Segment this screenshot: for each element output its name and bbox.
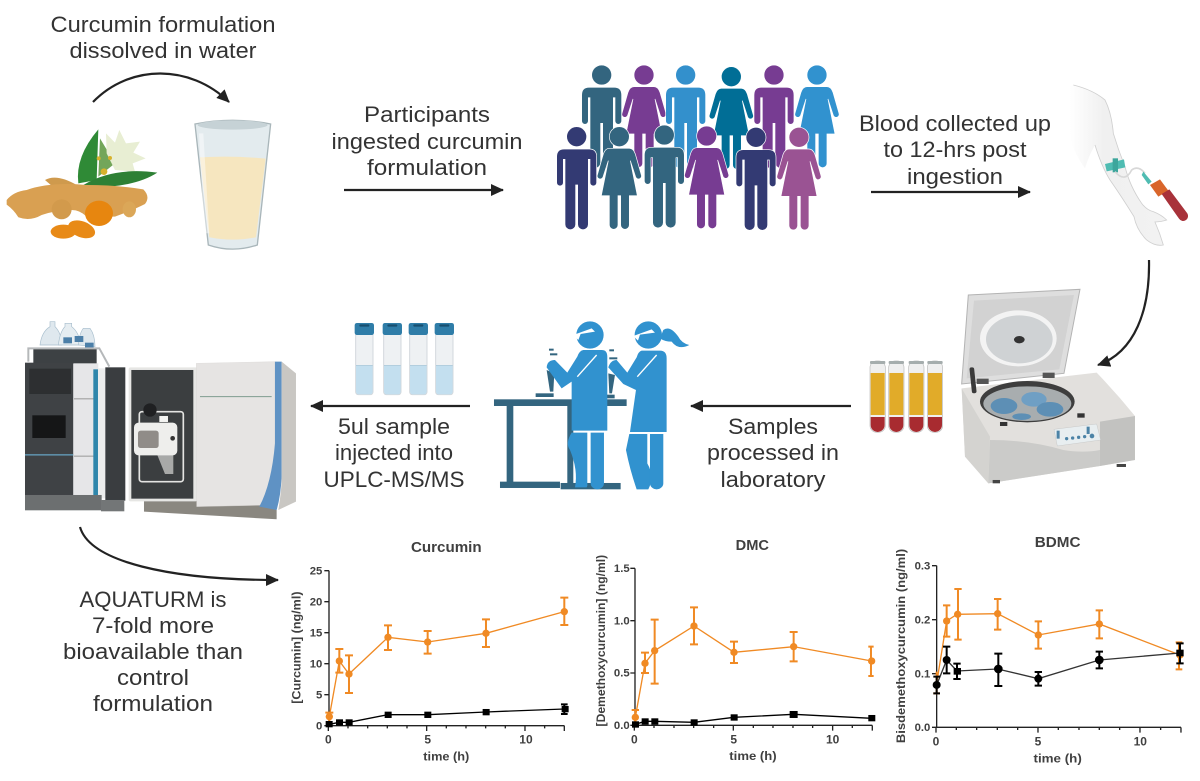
axis tick labels: 0.3 xyxy=(915,560,930,572)
text: key finding xyxy=(63,587,243,716)
orange series xyxy=(325,598,568,722)
chart title: DMC: DMC xyxy=(736,538,769,554)
axis tick labels: 10 xyxy=(310,658,322,670)
black series xyxy=(933,643,1184,693)
axis tick labels: 10 xyxy=(519,732,533,746)
axes xyxy=(630,568,872,731)
black series xyxy=(632,711,875,728)
y axis label: Bisdemethoxycurcumin (ng/ml) xyxy=(894,549,908,743)
chart: BDMC xyxy=(894,535,1184,766)
icon: centrifuge xyxy=(962,289,1135,483)
black series xyxy=(326,704,569,727)
text: blood collected xyxy=(859,111,1051,189)
axis tick labels: 0 xyxy=(933,734,940,748)
text: key finding: bioavailable than xyxy=(63,639,243,664)
axis tick labels: 0.0 xyxy=(915,722,930,734)
text: sample injection: injected into xyxy=(335,440,453,465)
text: participants ingested: Participants xyxy=(364,102,490,127)
axes xyxy=(324,571,564,731)
heading: formulation dissolved: dissolved in water xyxy=(70,38,256,63)
arrow: to participants xyxy=(344,189,503,191)
axis tick labels: time (h) xyxy=(729,749,777,763)
icon: arm with blood draw xyxy=(1070,85,1188,245)
chart title: BDMC: BDMC xyxy=(1035,535,1081,551)
text: key finding: AQUATURM is xyxy=(80,587,226,612)
heading: formulation dissolved: Curcumin formulation xyxy=(50,12,276,37)
axis tick labels: 0 xyxy=(631,732,638,746)
axis tick labels: 1.5 xyxy=(614,563,630,575)
axis tick labels: 1.0 xyxy=(614,615,630,627)
text: samples processed: processed in xyxy=(707,440,839,465)
arrow: to laboratory xyxy=(691,405,851,407)
icon: group of participants xyxy=(557,65,839,230)
icon: separated blood tubes xyxy=(870,361,943,432)
axis tick labels: 10 xyxy=(826,732,840,746)
arrow: to UPLC-MS/MS xyxy=(311,405,470,407)
text: samples processed xyxy=(707,414,839,492)
y axis label: [Curcumin] (ng/ml) xyxy=(290,591,304,704)
text: samples processed: Samples xyxy=(728,414,818,439)
text: participants ingested: formulation xyxy=(367,155,487,180)
axis tick labels: time (h) xyxy=(1033,752,1082,766)
orange series xyxy=(632,607,875,723)
axis tick labels: 0 xyxy=(316,720,322,732)
orange series xyxy=(933,589,1184,693)
text: key finding: 7-fold more xyxy=(92,613,214,638)
icon: lab scientists at bench xyxy=(494,321,689,489)
text: key finding: control xyxy=(117,665,189,690)
heading: formulation dissolved xyxy=(50,12,276,63)
chart: DMC xyxy=(594,538,875,763)
axis tick labels: 5 xyxy=(316,689,322,701)
text: sample injection: UPLC-MS/MS xyxy=(324,467,464,492)
axis tick labels: 5 xyxy=(730,732,737,746)
axis tick labels: 5 xyxy=(1035,734,1042,748)
axis tick labels: 15 xyxy=(310,627,322,639)
axis tick labels: 0 xyxy=(325,732,332,746)
arrow: to centrifuge xyxy=(1098,260,1149,365)
axis tick labels: 25 xyxy=(310,565,322,577)
axis tick labels xyxy=(310,565,533,764)
arrow: to blood collection xyxy=(871,191,1030,193)
y axis label: [Demethoxycurcumin] (ng/ml) xyxy=(594,555,608,726)
icon: sample vials xyxy=(355,323,454,395)
axis tick labels: 5 xyxy=(424,732,431,746)
axis tick labels: 20 xyxy=(310,596,322,608)
icon: glass of formulation xyxy=(195,120,271,249)
text: sample injection xyxy=(324,414,464,492)
chart: Curcumin xyxy=(290,540,569,764)
text: blood collected: to 12-hrs post xyxy=(884,137,1026,162)
arrow: to results xyxy=(80,527,278,580)
text: blood collected: Blood collected up xyxy=(859,111,1051,136)
axis tick labels xyxy=(614,563,840,763)
axis tick labels: 10 xyxy=(1134,734,1147,748)
text: participants ingested: ingested curcumin xyxy=(332,129,522,154)
chart title: Curcumin: Curcumin xyxy=(411,540,482,556)
axis tick labels xyxy=(915,560,1147,766)
axis tick labels: time (h) xyxy=(423,750,469,764)
arrow: turmeric to glass xyxy=(93,74,229,102)
axis tick labels: 0.0 xyxy=(614,720,630,732)
text: participants ingested xyxy=(332,102,522,180)
axis tick labels: 0.2 xyxy=(915,614,930,626)
axis tick labels: 0.1 xyxy=(915,668,930,680)
text: blood collected: ingestion xyxy=(907,164,1003,189)
text: key finding: formulation xyxy=(93,691,213,716)
axis tick labels: 0.5 xyxy=(614,668,630,680)
icon: turmeric root and flower xyxy=(7,129,157,242)
text: samples processed: laboratory xyxy=(720,467,826,492)
axes xyxy=(932,566,1181,733)
icon: UPLC-MS/MS instrument xyxy=(25,322,296,519)
text: sample injection: 5ul sample xyxy=(338,414,450,439)
